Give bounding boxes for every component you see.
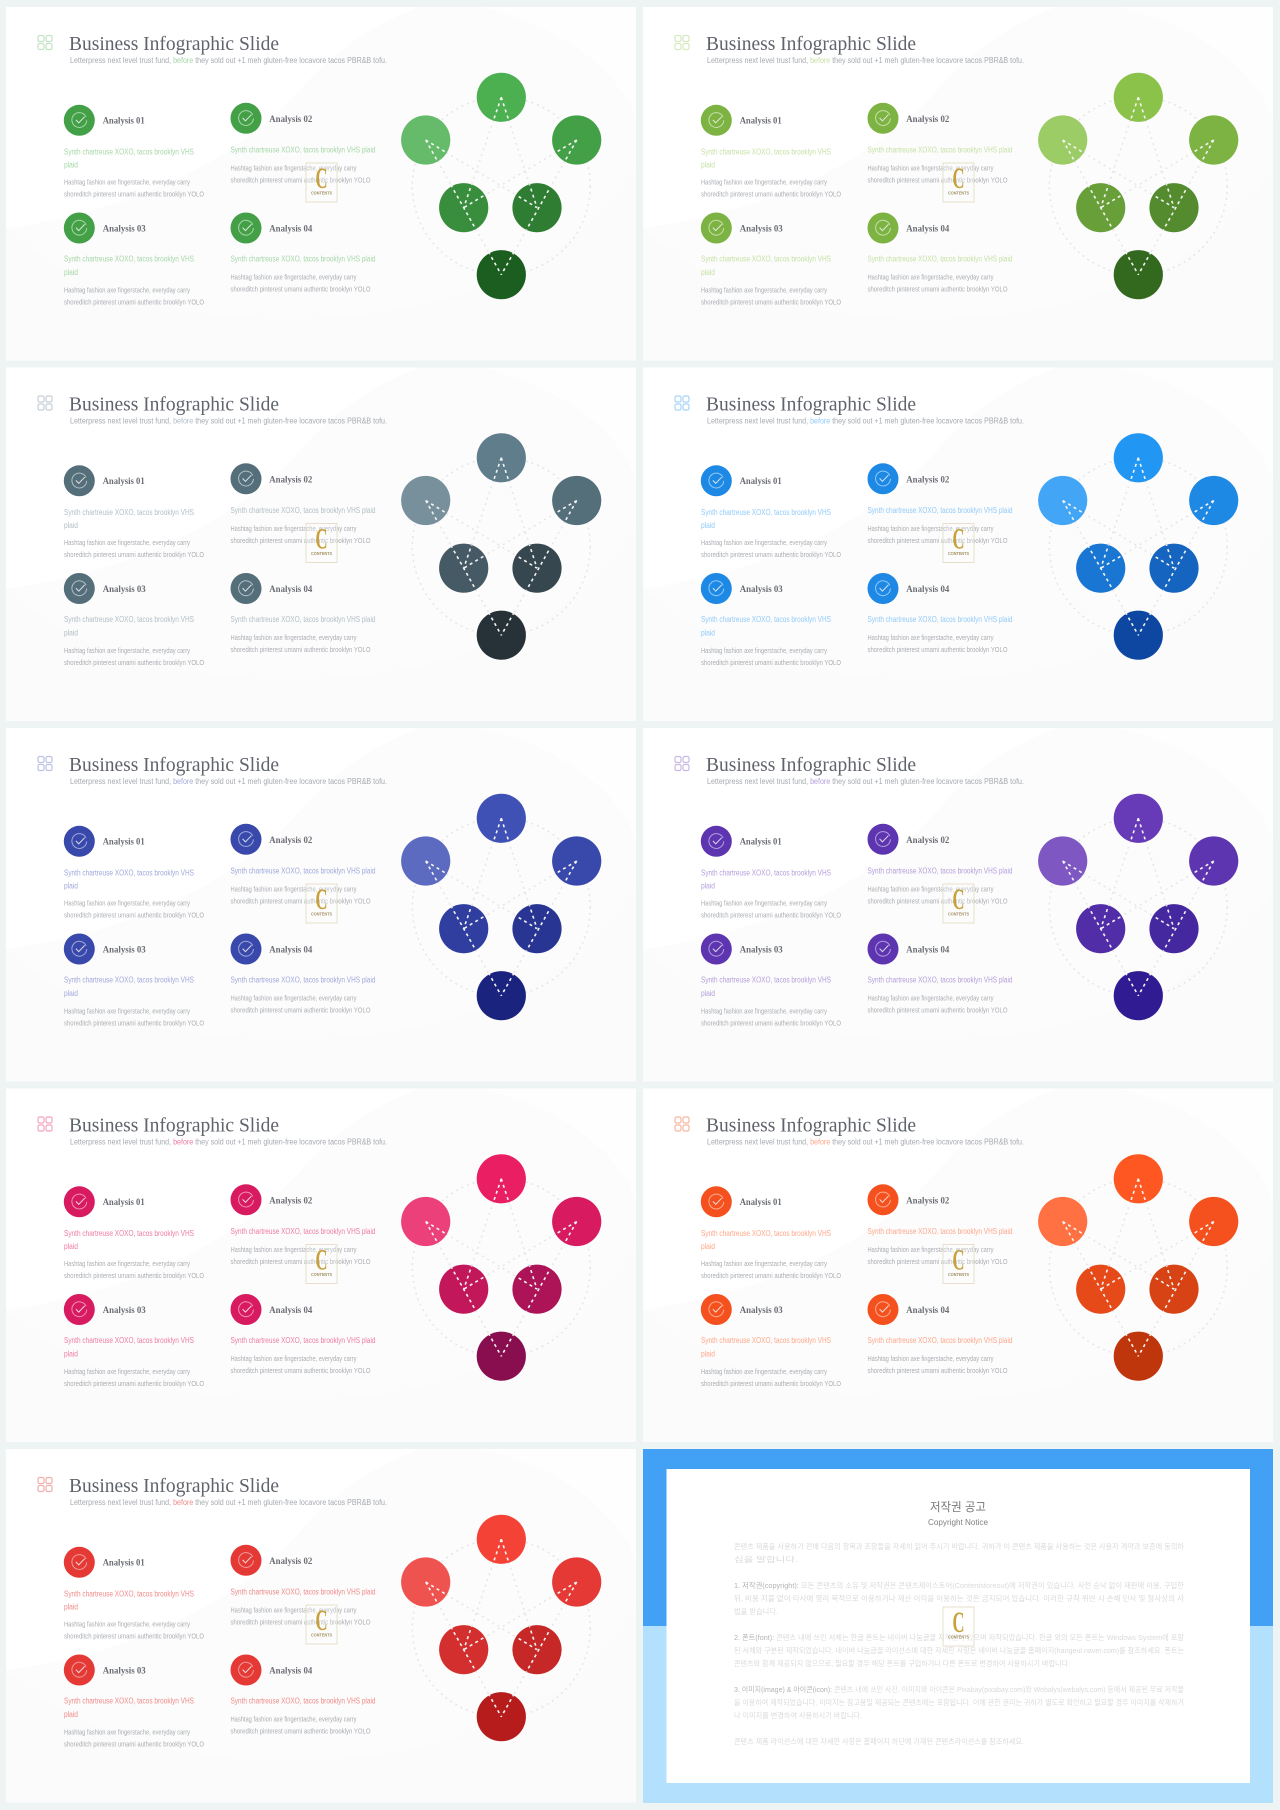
item: Analysis 03: Synth chartreuse XOXO, tacos brooklyn VHS: [64, 1336, 194, 1345]
item: Analysis 03: Analysis 03: [103, 1666, 146, 1676]
item: Analysis 03: Analysis 03: [103, 224, 146, 234]
item: Analysis 04: shoreditch pinterest umami authentic brooklyn YOLO: [868, 645, 1008, 654]
item: Analysis 02: [868, 463, 1012, 545]
heading: Business Infographic Slide: [69, 1475, 279, 1497]
panel: deep orange slide: [643, 1088, 1273, 1442]
item: Analysis 02: Hashtag fashion axe fingerstache, everyday carry: [868, 1245, 994, 1254]
text block: copyright: [734, 1580, 1184, 1616]
item: Analysis 01: plaid: [64, 1242, 78, 1251]
item: Analysis 02: Hashtag fashion axe fingerstache, everyday carry: [868, 164, 994, 172]
watermark: C: [952, 1606, 964, 1639]
panel: deep purple slide: [643, 728, 1273, 1082]
item: Analysis 02: Analysis 02: [269, 1196, 313, 1206]
item: Analysis 02: shoreditch pinterest umami authentic brooklyn YOLO: [230, 896, 371, 906]
watermark: CONTENTS: [311, 1632, 332, 1638]
item: Analysis 01: Synth chartreuse XOXO, tacos brooklyn VHS: [701, 508, 831, 517]
watermark: CONTENTS: [948, 1634, 969, 1640]
item: Analysis 02: Synth chartreuse XOXO, tacos brooklyn VHS plaid: [868, 506, 1012, 515]
item: Analysis 01: shoreditch pinterest umami authentic brooklyn YOLO: [64, 190, 204, 198]
diagram: circle network: [1038, 73, 1238, 299]
item: Analysis 04: [230, 934, 376, 1015]
item: Analysis 03: plaid: [701, 1350, 715, 1358]
item: Analysis 02: Hashtag fashion axe fingerstache, everyday carry: [868, 884, 994, 894]
item: Analysis 01: Analysis 01: [740, 1197, 782, 1207]
text block: image and icon: 3. 이미지(image) & 아이콘(icon): 콘텐츠 내에 쓰인 사진, 이미지와 아이콘은 Pixabay(pixabay.com)와 Webalys(webalys.com) 등에서 제공된 무료 저작물: [734, 1684, 1184, 1694]
item: Analysis 01: shoreditch pinterest umami authentic brooklyn YOLO: [64, 910, 204, 920]
diagram: circle network: [1038, 1154, 1238, 1381]
item: Analysis 03: Hashtag fashion axe fingerstache, everyday carry: [64, 1007, 190, 1016]
text block: copyright: 법을 받습니다.: [734, 1606, 778, 1616]
item: Analysis 03: shoreditch pinterest umami authentic brooklyn YOLO: [701, 298, 841, 307]
item: Analysis 02: shoreditch pinterest umami authentic brooklyn YOLO: [230, 176, 371, 184]
item: Analysis 04: shoreditch pinterest umami authentic brooklyn YOLO: [230, 1727, 371, 1736]
item: Analysis 03: Hashtag fashion axe fingerstache, everyday carry: [64, 646, 190, 655]
watermark: CONTENTS: [311, 551, 332, 556]
item: Analysis 01: shoreditch pinterest umami authentic brooklyn YOLO: [701, 190, 841, 198]
item: Analysis 01: Analysis 01: [103, 1197, 145, 1207]
item: Analysis 01: plaid: [701, 882, 715, 890]
item: Analysis 01: plaid: [701, 160, 715, 170]
item: Analysis 04: Hashtag fashion axe fingerstache, everyday carry: [230, 1715, 357, 1724]
item: Analysis 01: Synth chartreuse XOXO, tacos brooklyn VHS: [64, 148, 194, 156]
item: Analysis 03: Hashtag fashion axe fingerstache, everyday carry: [64, 1728, 190, 1737]
text block: font: 콘텐츠와 함께 제공되지 않으므로, 필요할 경우 해당 폰트를 구입하거나 다른 폰트로 변경하여 사용하시기 바랍니다.: [734, 1658, 1070, 1668]
panel: green slide: [6, 7, 636, 361]
icon: grid: [675, 396, 689, 410]
item: Analysis 03: Hashtag fashion axe fingerstache, everyday carry: [701, 646, 827, 655]
item: Analysis 03: [64, 573, 204, 667]
panel: red slide: [6, 1449, 636, 1803]
watermark: [306, 1604, 337, 1644]
item: Analysis 04: Synth chartreuse XOXO, tacos brooklyn VHS plaid: [230, 976, 376, 985]
watermark: [306, 522, 337, 562]
item: Analysis 04: [868, 212, 1012, 294]
item: Analysis 03: Analysis 03: [103, 1305, 146, 1315]
item: Analysis 03: shoreditch pinterest umami authentic brooklyn YOLO: [64, 298, 204, 307]
watermark: C: [316, 162, 328, 195]
heading: Business Infographic Slide: [706, 33, 916, 55]
watermark: CONTENTS: [311, 912, 332, 916]
item: Analysis 02: Synth chartreuse XOXO, tacos brooklyn VHS plaid: [868, 146, 1012, 154]
item: Analysis 03: plaid: [701, 268, 715, 277]
item: Analysis 04: Synth chartreuse XOXO, tacos brooklyn VHS plaid: [868, 1336, 1012, 1345]
item: Analysis 01: [701, 826, 841, 920]
item: Analysis 01: Analysis 01: [103, 836, 145, 846]
diagram: circle network: [1038, 433, 1238, 660]
item: Analysis 01: Hashtag fashion axe fingerstache, everyday carry: [701, 538, 827, 547]
item: Analysis 03: Synth chartreuse XOXO, tacos brooklyn VHS: [701, 255, 831, 264]
item: Analysis 01: plaid: [64, 521, 78, 530]
diagram: circle network: [401, 433, 601, 660]
item: Analysis 01: Hashtag fashion axe fingerstache, everyday carry: [64, 1620, 190, 1628]
item: Analysis 03: plaid: [701, 628, 715, 638]
watermark: [943, 883, 974, 923]
item: Analysis 03: shoreditch pinterest umami authentic brooklyn YOLO: [64, 658, 204, 667]
text block: image and icon: 나 이미지를 변경하여 사용하시기 바랍니다.: [734, 1710, 862, 1720]
item: Analysis 04: Analysis 04: [906, 1305, 950, 1315]
item: Analysis 01: Analysis 01: [103, 116, 145, 126]
item: Analysis 02: [230, 463, 376, 545]
item: Analysis 03: plaid: [701, 989, 715, 998]
text block: font: 2. 폰트(font): 콘텐츠 내에 쓰인 서체는 한글 폰트는 네이버 나눔글꼴 저작권이 있으며 저작되었습니다. 한글 외의 모든 폰트는 Windows System에 포함: [734, 1632, 1184, 1642]
item: Analysis 02: Hashtag fashion axe fingerstache, everyday carry: [868, 524, 994, 533]
item: Analysis 02: shoreditch pinterest umami authentic brooklyn YOLO: [868, 896, 1008, 906]
item: Analysis 03: Hashtag fashion axe fingerstache, everyday carry: [701, 1367, 827, 1376]
watermark: CONTENTS: [948, 912, 969, 916]
watermark: CONTENTS: [948, 190, 969, 196]
watermark: C: [316, 522, 328, 556]
item: Analysis 01: plaid: [701, 521, 715, 530]
item: Analysis 01: [701, 465, 841, 559]
item: Analysis 03: plaid: [64, 1710, 78, 1719]
watermark: C: [952, 162, 964, 195]
heading: Business Infographic Slide: [69, 33, 279, 55]
item: Analysis 04: Hashtag fashion axe fingerstache, everyday carry: [868, 994, 994, 1003]
watermark: CONTENTS: [311, 190, 332, 196]
subtitle: Letterpress next level trust fund, before they sold out +1 meh gluten-free locavore tacos PBR&B tofu.: [707, 1138, 1024, 1146]
item: Analysis 01: shoreditch pinterest umami authentic brooklyn YOLO: [701, 550, 841, 559]
icon: grid: [38, 756, 52, 770]
diagram: circle network: [401, 794, 601, 1020]
item: Analysis 04: shoreditch pinterest umami authentic brooklyn YOLO: [230, 1006, 371, 1015]
item: Analysis 01: Synth chartreuse XOXO, tacos brooklyn VHS: [64, 1229, 194, 1238]
watermark: [943, 1606, 974, 1646]
item: Analysis 01: plaid: [701, 1242, 715, 1251]
item: Analysis 03: Hashtag fashion axe fingerstache, everyday carry: [701, 286, 827, 295]
item: Analysis 01: plaid: [64, 1602, 78, 1612]
item: Analysis 04: [868, 573, 1012, 654]
item: Analysis 03: Hashtag fashion axe fingerstache, everyday carry: [701, 1007, 827, 1016]
item: Analysis 02: shoreditch pinterest umami authentic brooklyn YOLO: [868, 536, 1008, 545]
item: Analysis 04: Analysis 04: [269, 1305, 313, 1315]
item: Analysis 02: shoreditch pinterest umami authentic brooklyn YOLO: [230, 1257, 371, 1266]
item: Analysis 03: Synth chartreuse XOXO, tacos brooklyn VHS: [64, 615, 194, 624]
item: Analysis 02: Hashtag fashion axe fingerstache, everyday carry: [230, 524, 357, 533]
watermark: C: [952, 883, 964, 916]
item: Analysis 03: [701, 212, 841, 307]
text block: image and icon: 을 이용하여 제작되었습니다. 이미지는 참고용일 제공되는 콘텐츠에는 포함됩니다. 이에 관한 권리는 귀하가 별도로 확인하고 필요할 경우 이미지를 삭제하거: [734, 1697, 1184, 1707]
item: Analysis 03: Hashtag fashion axe fingerstache, everyday carry: [64, 286, 190, 295]
heading: Business Infographic Slide: [706, 394, 916, 416]
item: Analysis 03: shoreditch pinterest umami authentic brooklyn YOLO: [64, 1379, 204, 1388]
diagram: circle network: [401, 1515, 601, 1741]
item: Analysis 02: [230, 103, 376, 184]
item: Analysis 04: Analysis 04: [269, 945, 313, 955]
item: Analysis 01: [701, 105, 841, 198]
diagram: circle network: [401, 1154, 601, 1381]
icon: grid: [38, 396, 52, 410]
item: Analysis 02: Hashtag fashion axe fingerstache, everyday carry: [230, 1245, 357, 1254]
item: Analysis 02: Analysis 02: [269, 114, 313, 124]
item: Analysis 02: shoreditch pinterest umami authentic brooklyn YOLO: [230, 1618, 371, 1626]
item: Analysis 02: Analysis 02: [906, 114, 950, 124]
text block: intro: 콘텐츠 제품을 사용하기 전에 다음의 항목과 조항들을 자세히 읽어 주시기 바랍니다. 귀하가 이 콘텐츠 제품을 사용하는 것은 사용자 계약과 보증에 동의하: [734, 1541, 1184, 1551]
item: Analysis 04: Analysis 04: [269, 584, 313, 594]
item: Analysis 03: [64, 212, 204, 307]
item: Analysis 03: [64, 1294, 204, 1388]
item: Analysis 04: Hashtag fashion axe fingerstache, everyday carry: [230, 633, 357, 642]
text block: font: 된 서체와 구분된 제작되었습니다. 네이버 나눔글꼴 라이선스에 대한 자세한 사항은 네이버 나눔글꼴 홈페이지(hangeul.naver.com)를 참조하세요. 폰트는: [734, 1645, 1184, 1655]
item: Analysis 03: Synth chartreuse XOXO, tacos brooklyn VHS: [701, 1336, 831, 1345]
icon: grid: [675, 756, 689, 770]
item: Analysis 01: Hashtag fashion axe fingerstache, everyday carry: [701, 898, 827, 908]
item: Analysis 01: [64, 105, 204, 198]
item: Analysis 04: Analysis 04: [906, 584, 950, 594]
text block: font: [734, 1632, 1184, 1668]
text block: intro: 심을 말합니다.: [734, 1554, 798, 1564]
item: Analysis 02: Synth chartreuse XOXO, tacos brooklyn VHS plaid: [868, 1227, 1012, 1236]
panel: blue grey slide: [6, 368, 636, 722]
item: Analysis 01: plaid: [64, 160, 78, 170]
item: Analysis 01: shoreditch pinterest umami authentic brooklyn YOLO: [64, 1632, 204, 1640]
item: Analysis 03: Analysis 03: [740, 224, 783, 234]
item: Analysis 01: Synth chartreuse XOXO, tacos brooklyn VHS: [701, 868, 831, 878]
item: Analysis 01: Synth chartreuse XOXO, tacos brooklyn VHS: [64, 868, 194, 878]
icon: grid: [38, 1117, 52, 1131]
icon: grid: [675, 1117, 689, 1131]
item: Analysis 04: shoreditch pinterest umami authentic brooklyn YOLO: [868, 1006, 1008, 1015]
item: Analysis 02: Synth chartreuse XOXO, tacos brooklyn VHS plaid: [868, 866, 1012, 876]
item: Analysis 04: shoreditch pinterest umami authentic brooklyn YOLO: [868, 1366, 1008, 1375]
icon: grid: [38, 1478, 52, 1492]
panel: indigo slide: [6, 728, 636, 1082]
item: Analysis 01: shoreditch pinterest umami authentic brooklyn YOLO: [701, 910, 841, 920]
item: Analysis 01: [64, 1186, 204, 1280]
item: Analysis 03: Analysis 03: [103, 584, 146, 594]
item: Analysis 02: [868, 103, 1012, 184]
icon: grid: [38, 36, 52, 50]
heading: Business Infographic Slide: [69, 394, 279, 416]
item: Analysis 04: Hashtag fashion axe fingerstache, everyday carry: [868, 273, 994, 282]
item: Analysis 04: Hashtag fashion axe fingerstache, everyday carry: [230, 273, 357, 282]
item: Analysis 02: Synth chartreuse XOXO, tacos brooklyn VHS plaid: [230, 506, 376, 515]
heading: Business Infographic Slide: [706, 754, 916, 776]
text block: license note: 콘텐츠 제품 라이선스에 대한 자세한 사항은 홈페이지 하단에 기재된 콘텐츠라이선스를 참조하세요.: [734, 1736, 1024, 1746]
item: Analysis 02: [230, 1545, 376, 1626]
item: Analysis 02: Hashtag fashion axe fingerstache, everyday carry: [230, 1606, 357, 1614]
item: Analysis 02: shoreditch pinterest umami authentic brooklyn YOLO: [230, 536, 371, 545]
item: Analysis 01: Hashtag fashion axe fingerstache, everyday carry: [64, 178, 190, 186]
item: Analysis 03: Hashtag fashion axe fingerstache, everyday carry: [64, 1367, 190, 1376]
item: Analysis 03: [701, 1294, 841, 1388]
item: Analysis 01: [701, 1186, 841, 1280]
item: Analysis 04: Synth chartreuse XOXO, tacos brooklyn VHS plaid: [230, 615, 376, 624]
watermark: C: [316, 1244, 328, 1276]
subtitle: Letterpress next level trust fund, before they sold out +1 meh gluten-free locavore tacos PBR&B tofu.: [707, 56, 1024, 65]
item: Analysis 03: [701, 573, 841, 667]
text block: intro: [734, 1541, 1184, 1564]
item: Analysis 01: plaid: [64, 882, 78, 890]
item: Analysis 01: Hashtag fashion axe fingerstache, everyday carry: [64, 1259, 190, 1268]
item: Analysis 04: [230, 573, 376, 654]
item: Analysis 01: shoreditch pinterest umami authentic brooklyn YOLO: [64, 550, 204, 559]
item: Analysis 04: [868, 1294, 1012, 1375]
subtitle: Letterpress next level trust fund, before they sold out +1 meh gluten-free locavore tacos PBR&B tofu.: [707, 777, 1024, 786]
watermark: [943, 162, 974, 202]
item: Analysis 02: [868, 1184, 1012, 1266]
item: Analysis 04: Synth chartreuse XOXO, tacos brooklyn VHS plaid: [868, 255, 1012, 264]
item: Analysis 01: Analysis 01: [103, 1558, 145, 1568]
watermark: CONTENTS: [948, 551, 969, 556]
heading: Business Infographic Slide: [69, 754, 279, 776]
item: Analysis 01: Analysis 01: [740, 836, 782, 846]
item: Analysis 03: [64, 934, 204, 1028]
item: Analysis 02: Analysis 02: [906, 474, 950, 484]
item: Analysis 02: shoreditch pinterest umami authentic brooklyn YOLO: [868, 1257, 1008, 1266]
panel: copyright notice: [643, 1449, 1273, 1803]
item: Analysis 03: [701, 934, 841, 1028]
item: Analysis 04: shoreditch pinterest umami authentic brooklyn YOLO: [230, 1366, 371, 1375]
item: Analysis 04: Hashtag fashion axe fingerstache, everyday carry: [230, 1354, 357, 1363]
panel: light green slide: [643, 7, 1273, 361]
item: Analysis 03: Analysis 03: [103, 945, 146, 955]
item: Analysis 01: Hashtag fashion axe fingerstache, everyday carry: [701, 1259, 827, 1268]
watermark: CONTENTS: [311, 1272, 332, 1277]
item: Analysis 01: shoreditch pinterest umami authentic brooklyn YOLO: [701, 1271, 841, 1280]
text block: copyright: 1. 저작권(copyright): 모든 콘텐츠의 소유 및 저작권은 콘텐츠제이스토어(Contentstoreout)에 저작권이 있습니다. 사전 승낙 없이 재판매 이용, 구입한: [734, 1580, 1184, 1590]
subtitle: Letterpress next level trust fund, before they sold out +1 meh gluten-free locavore tacos PBR&B tofu.: [70, 777, 387, 786]
item: Analysis 03: plaid: [64, 268, 78, 277]
item: Analysis 04: shoreditch pinterest umami authentic brooklyn YOLO: [230, 285, 371, 294]
item: Analysis 03: Synth chartreuse XOXO, tacos brooklyn VHS: [701, 976, 831, 985]
watermark: [306, 162, 337, 202]
item: Analysis 03: [64, 1654, 204, 1749]
item: Analysis 04: Synth chartreuse XOXO, tacos brooklyn VHS plaid: [230, 1697, 376, 1706]
item: Analysis 03: shoreditch pinterest umami authentic brooklyn YOLO: [64, 1019, 204, 1028]
item: Analysis 03: Analysis 03: [740, 584, 783, 594]
item: Analysis 04: Hashtag fashion axe fingerstache, everyday carry: [868, 1354, 994, 1363]
item: Analysis 01: Analysis 01: [740, 116, 782, 126]
heading: Business Infographic Slide: [706, 1114, 916, 1136]
subtitle: Letterpress next level trust fund, before they sold out +1 meh gluten-free locavore tacos PBR&B tofu.: [70, 416, 387, 426]
item: Analysis 02: Synth chartreuse XOXO, tacos brooklyn VHS plaid: [230, 1227, 376, 1236]
item: Analysis 04: Hashtag fashion axe fingerstache, everyday carry: [230, 994, 357, 1003]
subtitle: Letterpress next level trust fund, before they sold out +1 meh gluten-free locavore tacos PBR&B tofu.: [70, 1498, 387, 1507]
item: Analysis 01: Hashtag fashion axe fingerstache, everyday carry: [64, 898, 190, 908]
item: Analysis 02: Analysis 02: [269, 474, 313, 484]
item: Analysis 01: Analysis 01: [103, 476, 145, 486]
item: Analysis 02: Analysis 02: [269, 835, 313, 845]
item: Analysis 03: Synth chartreuse XOXO, tacos brooklyn VHS: [701, 615, 831, 624]
item: Analysis 01: Hashtag fashion axe fingerstache, everyday carry: [701, 178, 827, 186]
item: Analysis 01: Synth chartreuse XOXO, tacos brooklyn VHS: [64, 1590, 194, 1598]
item: Analysis 04: Analysis 04: [906, 945, 950, 955]
diagram: circle network: [401, 73, 601, 299]
panel: blue slide: [643, 368, 1273, 722]
item: Analysis 01: shoreditch pinterest umami authentic brooklyn YOLO: [64, 1271, 204, 1280]
item: Analysis 01: Analysis 01: [740, 476, 782, 486]
item: Analysis 03: plaid: [64, 989, 78, 998]
item: Analysis 01: [64, 465, 204, 559]
item: Analysis 03: Analysis 03: [740, 1305, 783, 1315]
item: Analysis 03: plaid: [64, 628, 78, 638]
item: Analysis 04: Synth chartreuse XOXO, tacos brooklyn VHS plaid: [868, 615, 1012, 624]
watermark: [943, 522, 974, 562]
item: Analysis 02: Analysis 02: [906, 1196, 950, 1206]
watermark: [306, 883, 337, 923]
item: Analysis 01: [64, 1547, 204, 1640]
heading: Business Infographic Slide: [69, 1114, 279, 1136]
item: Analysis 03: shoreditch pinterest umami authentic brooklyn YOLO: [701, 658, 841, 667]
item: Analysis 04: Synth chartreuse XOXO, tacos brooklyn VHS plaid: [868, 976, 1012, 985]
subtitle: Letterpress next level trust fund, before they sold out +1 meh gluten-free locavore tacos PBR&B tofu.: [707, 416, 1024, 426]
item: Analysis 03: plaid: [64, 1350, 78, 1358]
watermark: C: [952, 522, 964, 556]
item: Analysis 02: [230, 1184, 376, 1266]
watermark: [943, 1244, 974, 1284]
item: Analysis 02: Hashtag fashion axe fingerstache, everyday carry: [230, 164, 357, 172]
item: Analysis 03: Synth chartreuse XOXO, tacos brooklyn VHS: [64, 1697, 194, 1706]
item: Analysis 03: shoreditch pinterest umami authentic brooklyn YOLO: [701, 1019, 841, 1028]
item: Analysis 04: [230, 212, 376, 294]
item: Analysis 04: Hashtag fashion axe fingerstache, everyday carry: [868, 633, 994, 642]
item: Analysis 03: Synth chartreuse XOXO, tacos brooklyn VHS: [64, 976, 194, 985]
item: Analysis 03: shoreditch pinterest umami authentic brooklyn YOLO: [701, 1379, 841, 1388]
watermark: CONTENTS: [948, 1272, 969, 1277]
item: Analysis 02: Synth chartreuse XOXO, tacos brooklyn VHS plaid: [230, 1588, 376, 1596]
item: Analysis 04: Analysis 04: [906, 224, 950, 234]
item: Analysis 01: [64, 826, 204, 920]
item: Analysis 02: Synth chartreuse XOXO, tacos brooklyn VHS plaid: [230, 866, 376, 876]
item: Analysis 01: Synth chartreuse XOXO, tacos brooklyn VHS: [64, 508, 194, 517]
item: Analysis 02: Hashtag fashion axe fingerstache, everyday carry: [230, 884, 357, 894]
item: Analysis 01: Synth chartreuse XOXO, tacos brooklyn VHS: [701, 1229, 831, 1238]
text block: copyright: 뒤, 비용 지불 없이 타사에 영리 목적으로 이용하거나 재산 이익을 이용하는 것은 금지되어 있습니다. 이러한 규칙 위반 시 손해 민사 및 형사상의 사: [734, 1593, 1184, 1603]
item: Analysis 02: [230, 824, 376, 906]
watermark: [306, 1244, 337, 1284]
item: Analysis 04: Analysis 04: [269, 224, 313, 234]
item: Analysis 03: Synth chartreuse XOXO, tacos brooklyn VHS: [64, 255, 194, 264]
item: Analysis 02: shoreditch pinterest umami authentic brooklyn YOLO: [868, 176, 1008, 184]
item: Analysis 02: Synth chartreuse XOXO, tacos brooklyn VHS plaid: [230, 146, 376, 154]
heading: English: Copyright Notice: [928, 1518, 989, 1527]
item: Analysis 01: Hashtag fashion axe fingerstache, everyday carry: [64, 538, 190, 547]
item: Analysis 03: shoreditch pinterest umami authentic brooklyn YOLO: [64, 1740, 204, 1749]
item: Analysis 04: [868, 934, 1012, 1015]
icon: grid: [675, 36, 689, 50]
subtitle: Letterpress next level trust fund, before they sold out +1 meh gluten-free locavore tacos PBR&B tofu.: [70, 1138, 387, 1146]
watermark: C: [316, 883, 328, 916]
item: Analysis 01: Synth chartreuse XOXO, tacos brooklyn VHS: [701, 148, 831, 156]
watermark: C: [316, 1604, 328, 1637]
subtitle: Letterpress next level trust fund, before they sold out +1 meh gluten-free locavore tacos PBR&B tofu.: [70, 56, 387, 65]
item: Analysis 04: Analysis 04: [269, 1666, 313, 1676]
item: Analysis 04: shoreditch pinterest umami authentic brooklyn YOLO: [868, 285, 1008, 294]
item: Analysis 04: [230, 1654, 376, 1736]
watermark: C: [952, 1244, 964, 1276]
panel: pink slide: [6, 1088, 636, 1442]
item: Analysis 04: Synth chartreuse XOXO, tacos brooklyn VHS plaid: [230, 255, 376, 264]
item: Analysis 02: Analysis 02: [906, 835, 950, 845]
item: Analysis 04: [230, 1294, 376, 1375]
item: Analysis 04: shoreditch pinterest umami authentic brooklyn YOLO: [230, 645, 371, 654]
diagram: circle network: [1038, 794, 1238, 1020]
item: Analysis 04: Synth chartreuse XOXO, tacos brooklyn VHS plaid: [230, 1336, 376, 1345]
text block: image and icon: [734, 1684, 1184, 1720]
item: Analysis 02: [868, 824, 1012, 906]
item: Analysis 03: Analysis 03: [740, 945, 783, 955]
heading: Korean: 저작권 공고: [930, 1500, 986, 1514]
item: Analysis 02: Analysis 02: [269, 1556, 313, 1566]
